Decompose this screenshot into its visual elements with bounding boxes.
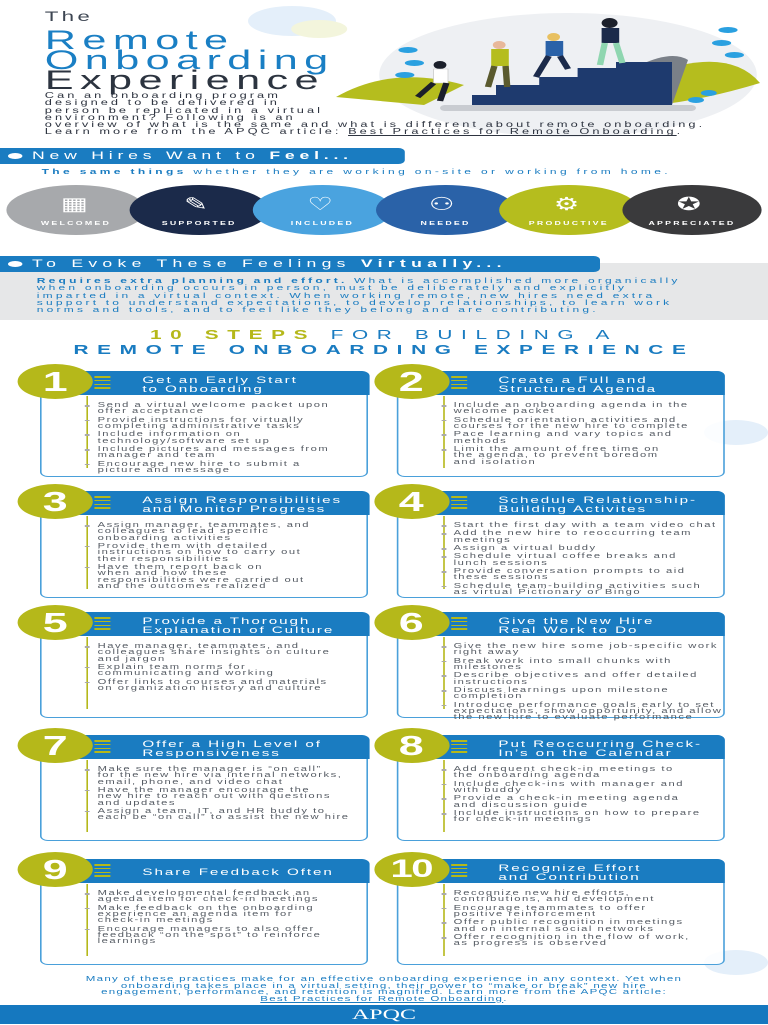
card 9: experience an agenda item for [98, 911, 293, 918]
card 9: feedback “on the spot” to reinforce [98, 932, 321, 939]
card 4: Add the new hire to reoccurring team [454, 530, 692, 537]
card 5: communicating and working [98, 670, 274, 677]
card 4: lunch sessions [454, 560, 548, 567]
card 5: and jargon [98, 656, 166, 663]
card 3: when and how these [98, 570, 228, 577]
card 2: Pace learning and vary topics and [454, 431, 672, 438]
intro text: Learn more from the APQC article: Best Practices for Remote Onboarding. [45, 127, 683, 136]
card 10: Offer recognition in the flow of work, [454, 934, 690, 941]
closing text: onboarding takes place in a virtual setting, their power to “make or break” new hire [121, 981, 647, 990]
card 7: Responsiveness [142, 748, 281, 759]
intro text: designed to be delivered in [45, 98, 280, 107]
footer: APQC logo bar: APQC [352, 1007, 416, 1023]
card 6: expectations, show opportunity, and allow [454, 708, 722, 715]
card 2: Include an onboarding agenda in the [454, 402, 689, 409]
banner: evoke virtually: To Evoke These Feelings Virtually... [32, 258, 507, 270]
title [45, 8, 335, 95]
card 1: technology/software set up [98, 438, 270, 445]
card 2: Limit the amount of free time on [454, 446, 660, 453]
card 10: Offer public recognition in meetings [454, 919, 684, 926]
circle: supported [130, 185, 269, 235]
illustration: team climbing stairs [336, 13, 760, 137]
card 3 [40, 491, 368, 598]
card 1: Encourage new hire to submit a [98, 461, 301, 468]
card 4: as virtual Pictionary or Bingo [454, 589, 641, 596]
card 1: Provide instructions for virtually [98, 417, 304, 424]
card 1: Send a virtual welcome packet upon [98, 402, 329, 409]
card 7: Offer a High Level of [142, 739, 322, 750]
decorative bubbles [248, 6, 336, 36]
card 4 [396, 491, 724, 598]
card 2 [396, 371, 724, 477]
steps heading: 10 STEPS FOR BUILDING A [150, 327, 618, 342]
card 1: picture and message [98, 467, 230, 474]
title: Experience [45, 65, 325, 95]
card 5: Have manager, teammates, and [98, 643, 300, 650]
card 7 [40, 735, 368, 841]
card 9: 9 [43, 854, 68, 885]
card 2: 2 [399, 366, 424, 397]
card 9: check-in meetings [98, 917, 214, 924]
intro text: person be replicated in a virtual [45, 106, 323, 115]
icons on circles: ✎ [184, 194, 208, 214]
card 3: instructions on how to carry out [98, 549, 301, 556]
card 7: each be “on call” to assist the new hire [98, 814, 350, 821]
card 5: 5 [43, 607, 68, 638]
card 6: Break work into small chunks with [454, 658, 672, 665]
closing text: Many of these practices make for an effective onboarding experience in any context. Yet when [86, 974, 682, 983]
card 3: onboarding activities [98, 535, 232, 542]
card 2: methods [454, 438, 507, 445]
card 3: 3 [43, 486, 68, 517]
circle: included: INCLUDED [291, 221, 354, 227]
card 9: learnings [98, 938, 157, 945]
card 2: and isolation [454, 459, 536, 466]
card 4: Building Activites [498, 504, 647, 515]
card 6: Describe objectives and offer detailed [454, 672, 698, 679]
title: Remote [45, 25, 234, 55]
card 6 [396, 612, 724, 718]
virtual text: Requires extra planning and effort. What is accomplished more organically [37, 276, 681, 285]
intro text: overview of what is the same and what is different about remote onboarding. [45, 120, 705, 129]
closing text: engagement, performance, and retention is magnified. Learn more from the APQC article: [101, 987, 667, 996]
card 8: and discussion guide [454, 802, 589, 809]
card 8: Include check-ins with manager and [454, 781, 684, 788]
gray box: virtual [0, 263, 768, 320]
card 6: completion [454, 693, 523, 700]
intro text: environment? Following is an [45, 113, 296, 122]
card 1: completing administrative tasks [98, 423, 300, 430]
card 2: Create a Full and [498, 375, 648, 386]
card 6: milestones [454, 664, 522, 671]
card 7: Have the manager encourage the [98, 787, 310, 794]
card 3: and the outcomes realized [98, 583, 267, 590]
banner: new hires want to feel [0, 148, 405, 164]
card 8: Include instructions on how to prepare [454, 810, 701, 817]
card 3: Assign manager, teammates, and [98, 522, 310, 529]
icons on circles: ▦ [61, 194, 88, 214]
card 9 [40, 859, 368, 965]
card 3: Provide them with detailed [98, 543, 268, 550]
card 10 [396, 859, 724, 965]
card 8: the onboarding agenda [454, 772, 601, 779]
card 5: Provide a Thorough [142, 616, 310, 627]
card 4: Start the first day with a team video chat [454, 522, 717, 529]
circle: welcomed: WELCOMED [41, 221, 111, 227]
card 8: Provide a check-in meeting agenda [454, 795, 679, 802]
card 10: Recognize new hire efforts, [454, 890, 630, 897]
card 6: Discuss learnings upon milestone [454, 687, 669, 694]
card 6: Give the New Hire [498, 616, 654, 627]
card 4: Schedule Relationship- [498, 495, 697, 506]
virtual text: support to understand expectations, to develop relationships, to learn work [37, 298, 672, 307]
card 1: offer acceptance [98, 408, 205, 415]
card 7: and updates [98, 800, 176, 807]
card 6: 6 [399, 607, 424, 638]
card 1: Include information on [98, 431, 241, 438]
card 5: Explain team norms for [98, 664, 246, 671]
card 9: agenda item for check-in meetings [98, 896, 319, 903]
card 1: 1 [43, 366, 68, 397]
circle: appreciated: APPRECIATED [648, 221, 736, 227]
card 4: 4 [399, 486, 424, 517]
circle: productive: PRODUCTIVE [529, 221, 609, 227]
card 8 [396, 735, 724, 841]
card 9: Make feedback on the onboarding [98, 905, 314, 912]
card 6: Real Work to Do [498, 625, 638, 636]
card 5: on organization history and culture [98, 685, 322, 692]
card 9: Share Feedback Often [142, 867, 334, 878]
card 1: Get an Early Start [142, 375, 298, 386]
card 2: courses for the new hire to complete [454, 423, 689, 430]
card 7: 7 [43, 730, 68, 761]
card 3: and Monitor Progress [142, 504, 326, 515]
circle: welcomed [6, 185, 146, 235]
card 4: Schedule team-building activities such [454, 583, 701, 590]
intro text: Can an onboarding program [45, 91, 281, 100]
card 1: Include pictures and messages from [98, 446, 329, 453]
card 8: In’s on the Calendar [498, 748, 673, 759]
card 7: email, phone, and video chat [98, 779, 283, 786]
card 3: responsibilities were carried out [98, 577, 305, 584]
card 10: positive reinforcement [454, 911, 597, 918]
card 1: to Onboarding [142, 384, 264, 395]
card 8: for check-in meetings [454, 816, 592, 823]
banner: evoke virtually [0, 256, 600, 272]
card 1 [40, 371, 368, 477]
card 3: Have them report back on [98, 564, 263, 571]
title: The [45, 8, 93, 24]
circle: included [253, 185, 392, 235]
virtual text: norms and tools, and to feel like they belong and are contributing. [37, 305, 599, 314]
circle: supported: SUPPORTED [162, 221, 237, 227]
card 10: as progress is observed [454, 940, 607, 947]
card 3: Assign Responsibilities [142, 495, 342, 506]
steps heading: REMOTE ONBOARDING EXPERIENCE [74, 342, 694, 357]
circle: productive [499, 185, 638, 235]
card 3: their responsibilities [98, 556, 229, 563]
card 4: meetings [454, 537, 511, 544]
card 7: Make sure the manager is “on call” [98, 766, 322, 773]
card 6: Give the new hire some job-specific work [454, 643, 718, 650]
card 8: with buddy [454, 787, 522, 794]
banner: new hires want to feel: New Hires Want to Feel... [32, 150, 353, 162]
card 2: welcome packet [454, 408, 555, 415]
icons on circles: ⚙ [554, 194, 579, 214]
card 2: Schedule orientation activities and [454, 417, 677, 424]
card 5: Offer links to courses and materials [98, 679, 328, 686]
card 6: Introduce performance goals early to set [454, 702, 715, 709]
closing text: Best Practices for Remote Onboarding. [260, 994, 508, 1003]
card 6: instructions [454, 679, 528, 686]
card 10: Encourage teammates to offer [454, 905, 647, 912]
card 3: colleagues to lead specific [98, 528, 269, 535]
steps heading [74, 327, 694, 357]
footer: APQC logo bar [0, 1005, 768, 1024]
intro text [45, 91, 705, 136]
virtual text: when onboarding occurs in person, must be deliberately and explicitly [37, 283, 627, 292]
card 7: for the new hire via internal networks, [98, 772, 342, 779]
card 7: Assign a team, IT, and HR buddy to [98, 808, 325, 815]
card 5: colleagues share insights on culture [98, 649, 330, 656]
card 6: the new hire to evaluate performance [454, 714, 693, 721]
subtitle: The same things whether they are working on-site or working from home. [42, 167, 671, 176]
circle: needed [376, 185, 515, 235]
card 4: Provide conversation prompts to aid [454, 568, 685, 575]
card 8: 8 [399, 730, 424, 761]
card 4: Schedule virtual coffee breaks and [454, 553, 677, 560]
card 8: Add frequent check-in meetings to [454, 766, 674, 773]
icons on circles: ✪ [677, 194, 701, 214]
feelings circles [6, 185, 762, 235]
virtual text [36, 276, 681, 314]
card 6: right away [454, 649, 520, 656]
title: Onboarding [45, 45, 335, 75]
card 7: new hire to reach out with questions [98, 793, 331, 800]
virtual text: imparted in a virtual context. When working remote, new hires need extra [37, 291, 655, 300]
card 10: and on internal social networks [454, 926, 654, 933]
card 9: Make developmental feedback an [98, 890, 311, 897]
icons on circles: ♡ [307, 194, 333, 214]
card 4: Assign a virtual buddy [454, 545, 597, 552]
icons on circles: ⚇ [429, 194, 455, 214]
card 2: the agenda, to prevent boredom [454, 452, 659, 459]
card 9: Encourage managers to also offer [98, 926, 315, 933]
card 4: these sessions [454, 574, 549, 581]
card 1: manager and team [98, 452, 216, 459]
icons on circles [61, 194, 701, 214]
card 10: contributions, and development [454, 896, 655, 903]
card 5 [40, 612, 368, 718]
card 10: 10 [391, 855, 432, 883]
circle: needed: NEEDED [421, 221, 471, 227]
card 2: Structured Agenda [498, 384, 657, 395]
card 10: Recognize Effort [498, 863, 641, 874]
card 8: Put Reoccurring Check- [498, 739, 702, 750]
closing text [86, 974, 682, 1003]
card 10: and Contribution [498, 872, 641, 883]
circle: appreciated [622, 185, 762, 235]
card 5: Explanation of Culture [142, 625, 334, 636]
